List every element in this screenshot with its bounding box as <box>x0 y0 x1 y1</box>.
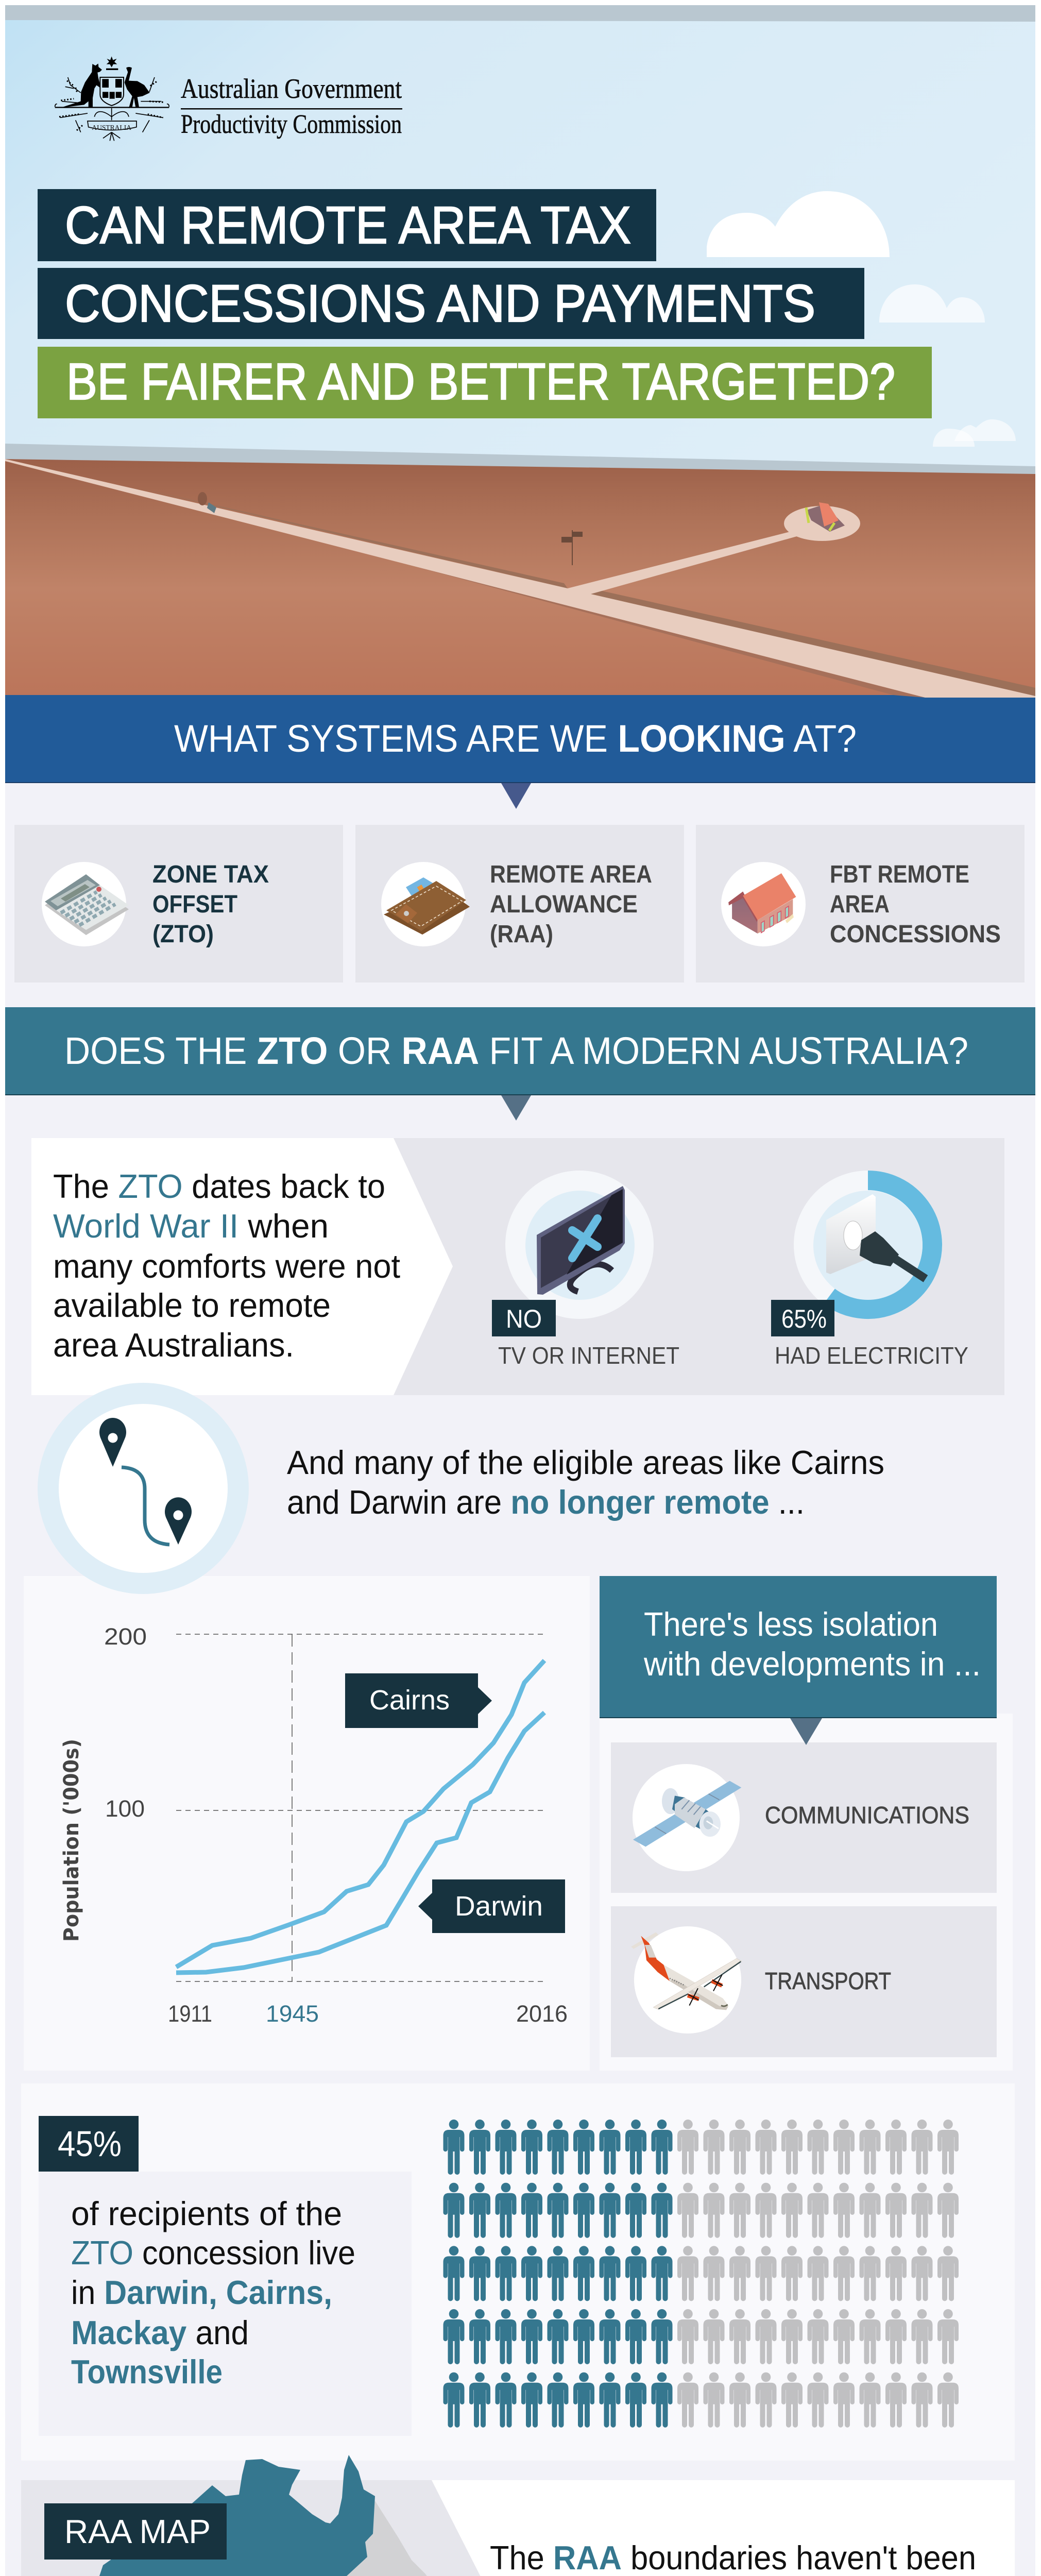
icon: coat of arms: AUSTRALIA <box>92 124 131 131</box>
card: zone tax offset <box>14 825 343 982</box>
text: no longer remote: And many of the eligible areas like Cairns <box>287 1444 884 1481</box>
department name <box>181 73 402 139</box>
caption: TV OR INTERNET <box>498 1342 679 1369</box>
pointer triangle <box>501 783 531 809</box>
axis labels: 100 <box>105 1795 145 1822</box>
road <box>5 459 1035 698</box>
text: ZTO history <box>53 1167 400 1364</box>
icon: house <box>728 873 796 934</box>
label: RAA map: RAA MAP <box>64 2513 211 2550</box>
label: (RAA) <box>490 921 553 948</box>
heading band: what systems: WHAT SYSTEMS ARE WE LOOKING AT? <box>174 717 857 760</box>
heading band: what systems <box>5 695 1035 783</box>
axis labels <box>104 1623 568 2027</box>
label: RAA map <box>44 2503 227 2560</box>
text block: Townsville <box>71 2353 223 2391</box>
card: communications: COMMUNICATIONS <box>765 1802 969 1828</box>
icon: plug with 65% ring <box>794 1171 942 1319</box>
label: ZONE TAX <box>152 861 269 888</box>
callout: Darwin: Darwin <box>455 1891 543 1922</box>
light section background <box>5 783 1035 2576</box>
line: Darwin <box>176 1713 544 1973</box>
title: three line banner: CAN REMOTE AREA TAX <box>65 196 631 255</box>
title: three line banner: CONCESSIONS AND PAYMENTS <box>65 274 815 333</box>
text block: ZTO concession live <box>71 2234 355 2272</box>
icon: wallet <box>384 877 470 935</box>
map of Australia <box>96 2455 448 2576</box>
icon: vehicle on road <box>198 492 216 513</box>
axis labels: 200 <box>104 1623 147 1650</box>
callout: Cairns <box>345 1673 492 1728</box>
label: ALLOWANCE <box>490 891 638 918</box>
card: transport <box>611 1906 997 2057</box>
line: Cairns <box>176 1660 544 1967</box>
department name: Productivity Commission <box>181 110 402 139</box>
text: ZTO history: available to remote <box>53 1286 331 1324</box>
clouds in hero <box>707 191 1016 447</box>
heading band: modern Australia <box>5 1007 1035 1095</box>
icon: satellite <box>633 1781 741 1846</box>
y axis title: Population ('000s) <box>60 1739 83 1942</box>
pictogram: people <box>443 2120 959 2428</box>
caption: HAD ELECTRICITY <box>775 1342 968 1369</box>
label: (ZTO) <box>152 921 214 948</box>
panel: 45 percent of recipients <box>21 2083 1015 2461</box>
heading band: modern Australia: DOES THE ZTO OR RAA FIT A MODERN AUSTRALIA? <box>64 1029 968 1072</box>
text block <box>39 2172 412 2436</box>
text: no longer remote <box>287 1444 884 1521</box>
text: ZTO history: area Australians. <box>53 1326 294 1364</box>
callout: Darwin <box>418 1879 565 1933</box>
text block: of recipients of the <box>71 2195 342 2232</box>
label: REMOTE AREA <box>490 861 652 888</box>
icon: calculator <box>45 874 129 935</box>
icon: location pins and route <box>38 1383 249 1594</box>
callout header: There's less isolation <box>644 1605 938 1643</box>
label: CONCESSIONS <box>830 921 1001 948</box>
pointer triangle <box>501 1095 531 1121</box>
stat: 45%: 45% <box>58 2124 122 2164</box>
text: ZTO history: The ZTO dates back to <box>53 1167 385 1205</box>
grid lines <box>176 1634 544 1981</box>
icon: signpost <box>561 530 583 565</box>
title: three line banner <box>38 189 932 418</box>
axis labels: 1911 <box>168 2001 212 2027</box>
card: remote area allowance <box>355 825 684 982</box>
icon: plane <box>631 1932 742 2010</box>
text: no longer remote: and Darwin are no longer remote ... <box>287 1483 805 1521</box>
pointer triangle <box>790 1718 822 1745</box>
logo: Australian Government Productivity Commission <box>55 56 402 141</box>
icon: coat of arms <box>55 56 169 141</box>
text: ZTO history: World War II when <box>53 1207 329 1245</box>
icon: TV crossed out <box>505 1171 654 1319</box>
axis labels: 1945 <box>266 2001 319 2027</box>
title: three line banner: BE FAIRER AND BETTER TARGETED? <box>66 353 895 411</box>
panel: ZTO history <box>31 1138 1004 1395</box>
department name: Australian Government <box>181 73 402 104</box>
card: communications <box>611 1742 997 1893</box>
label: FBT REMOTE <box>830 861 969 888</box>
text block: in Darwin, Cairns, <box>71 2274 332 2311</box>
label: AREA <box>830 891 890 918</box>
label <box>152 861 269 948</box>
label: 65%: 65% <box>781 1304 827 1333</box>
outback ground scene <box>5 459 1035 698</box>
callout header: with developments in ... <box>643 1645 981 1683</box>
card: FBT remote area concessions <box>696 825 1025 982</box>
panel: less isolation <box>600 1576 1013 2071</box>
text block: Mackay and <box>71 2314 249 2351</box>
callout: Cairns: Cairns <box>369 1685 450 1716</box>
label: no <box>492 1300 556 1336</box>
panel: RAA map <box>21 2455 1015 2576</box>
homestead clearing <box>784 502 860 541</box>
stat: 45% <box>39 2116 139 2172</box>
callout header <box>600 1576 997 1718</box>
text: ZTO history: many comforts were not <box>53 1247 400 1285</box>
label: 65% <box>771 1300 834 1336</box>
label: no: NO <box>506 1304 542 1333</box>
card: transport: TRANSPORT <box>765 1968 891 1994</box>
axis labels: 2016 <box>516 2001 568 2027</box>
hero sky panel <box>5 5 1035 479</box>
label: OFFSET <box>152 891 237 918</box>
label <box>830 861 1001 948</box>
panel: population chart <box>24 1576 590 2071</box>
label <box>490 861 652 948</box>
text: RAA boundaries: The RAA boundaries haven't been <box>490 2539 976 2576</box>
